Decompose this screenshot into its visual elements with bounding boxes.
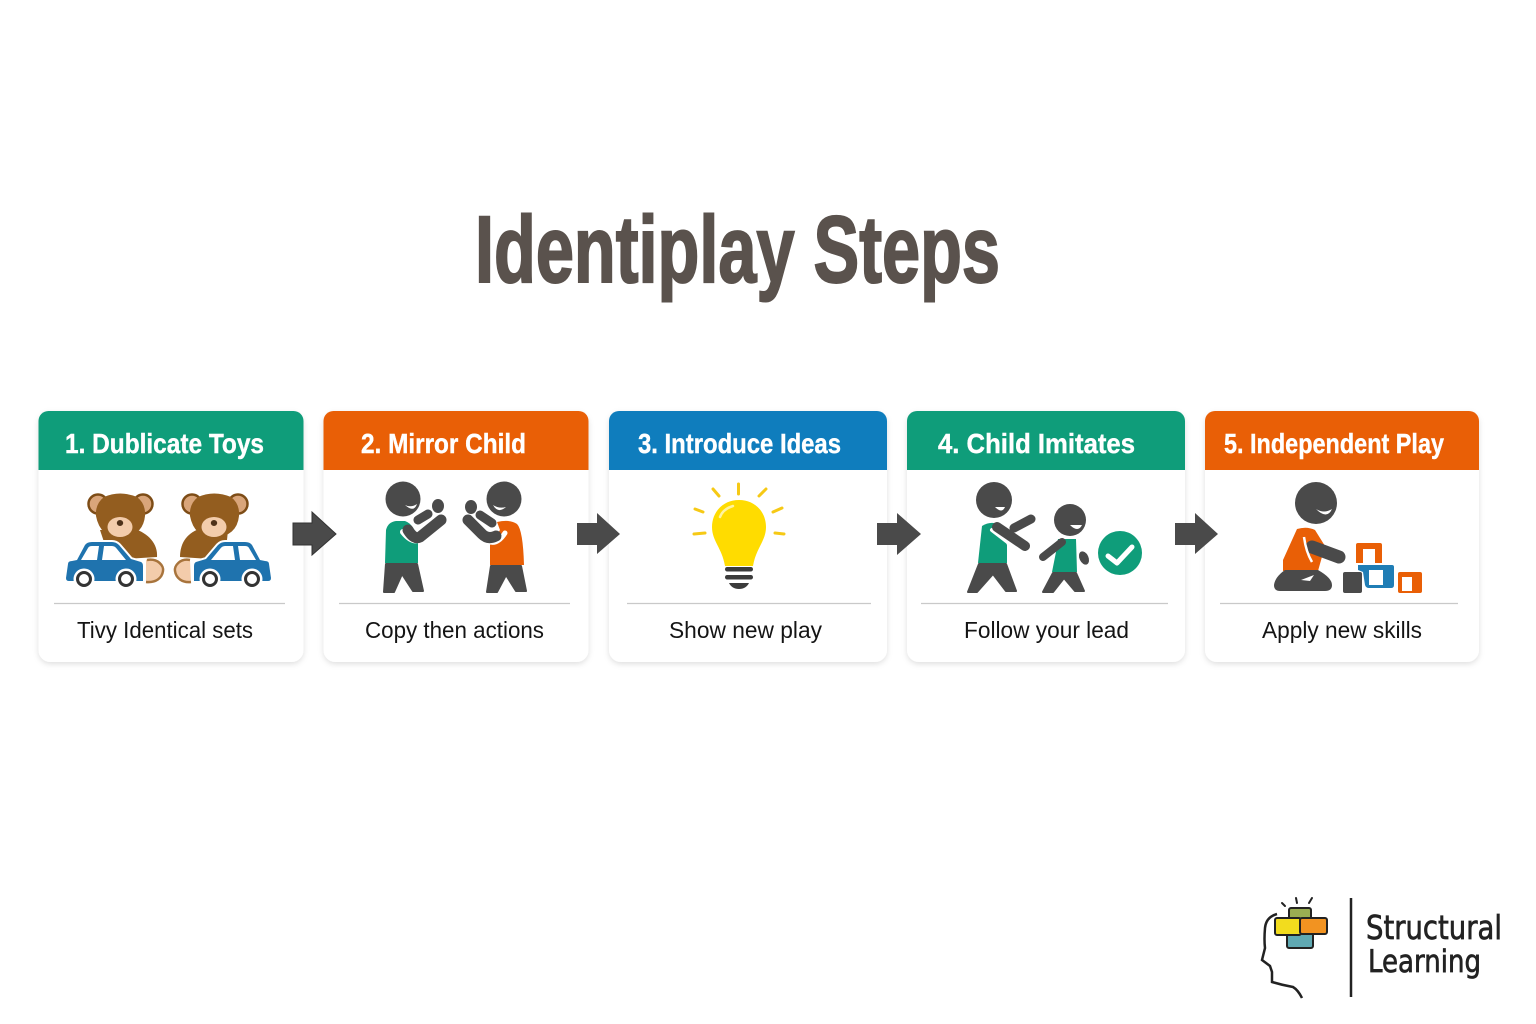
step 2 header bar [324, 411, 588, 470]
logo icon: head with blocks [1262, 898, 1327, 998]
arrow 4 to 5 [1175, 513, 1218, 554]
step 2 heading: 2. Mirror Child [361, 428, 526, 459]
icon: child playing with blocks [1274, 482, 1422, 593]
step 4 heading: 4. Child Imitates [938, 428, 1135, 459]
arrow 3 to 4 [877, 513, 921, 555]
panel: step 3 [609, 411, 887, 662]
icon: light bulb [694, 484, 784, 589]
step 1 header bar [38, 411, 304, 470]
icon: mirrored teddy bear with car [175, 494, 271, 590]
panel: step 5 [1205, 411, 1479, 662]
step 3 heading: 3. Introduce Ideas [638, 428, 841, 459]
panel: step 4 [907, 411, 1185, 662]
arrow 2 to 3 [577, 513, 620, 554]
step 3 caption: Show new play [669, 617, 822, 643]
step 4 header bar [907, 411, 1185, 470]
icon: adult figure copying [384, 482, 444, 592]
step 5 caption: Apply new skills [1262, 617, 1422, 643]
icon: child figure being mirrored [465, 482, 526, 592]
step 5 heading: 5. Independent Play [1224, 428, 1444, 459]
panel: step 2 [324, 411, 588, 662]
logo: Structural Learning [1262, 898, 1502, 998]
step 4 caption: Follow your lead [964, 617, 1129, 643]
title: Identiplay Steps [475, 197, 1000, 303]
icon: child imitating [1043, 504, 1091, 592]
icon: adult leading [968, 482, 1031, 592]
arrow 1 to 2 [293, 512, 336, 555]
icon: teddy bear with car [66, 494, 163, 590]
step 2 caption: Copy then actions [365, 617, 544, 643]
logo wordmark: Structural [1366, 908, 1502, 947]
step 5 header bar [1205, 411, 1479, 470]
step 1 heading: 1. Dublicate Toys [65, 428, 264, 459]
step 1 caption: Tivy Identical sets [77, 617, 253, 643]
step 3 header bar [609, 411, 887, 470]
logo wordmark [1366, 908, 1502, 980]
panel: step 1 [38, 411, 304, 662]
logo wordmark: Learning [1368, 944, 1481, 980]
icon: check mark badge [1098, 531, 1142, 575]
